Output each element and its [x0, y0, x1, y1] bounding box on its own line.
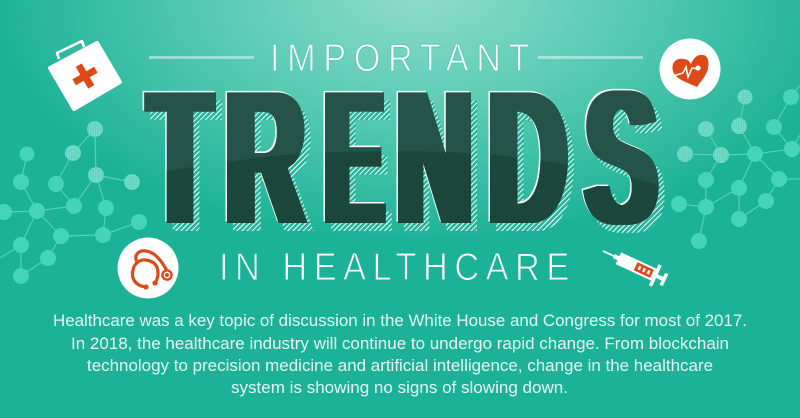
- letters TRENDS: S: [586, 51, 657, 266]
- intro paragraph: In 2018, the healthcare industry will continue to undergo rapid change. From blockchain: [71, 335, 729, 353]
- intro paragraph: Healthcare was a key topic of discussion in the White House and Congress for most of 2017.: [53, 312, 747, 330]
- letters TRENDS: T: [149, 49, 211, 265]
- right molecule network: [671, 85, 800, 249]
- intro paragraph: [53, 312, 747, 397]
- icon: stethoscope: [118, 238, 178, 298]
- letters TRENDS: E: [325, 50, 383, 265]
- left molecule network: [0, 121, 147, 284]
- letters TRENDS: N: [397, 50, 472, 265]
- dark lower sheen: [166, 152, 659, 225]
- intro paragraph: system is showing no signs of slowing down.: [231, 379, 568, 397]
- intro paragraph: technology to precision medicine and artificial intelligence, change in the healthcare: [87, 357, 713, 375]
- heading: TRENDS: [142, 88, 665, 233]
- icon: first aid kit: [50, 41, 120, 109]
- letters TRENDS: D: [489, 51, 567, 266]
- letters TRENDS: R: [226, 51, 305, 266]
- hatched letter shadow: [150, 100, 665, 233]
- letters TRENDS: [149, 49, 657, 266]
- heading: important: IMPORTANT: [270, 36, 530, 79]
- heading: important: [149, 36, 643, 79]
- icon: heart with pulse: [660, 38, 720, 100]
- white letter edge: [142, 88, 650, 222]
- heading: in healthcare: IN HEALTHCARE: [219, 245, 569, 288]
- icon: syringe: [598, 241, 670, 291]
